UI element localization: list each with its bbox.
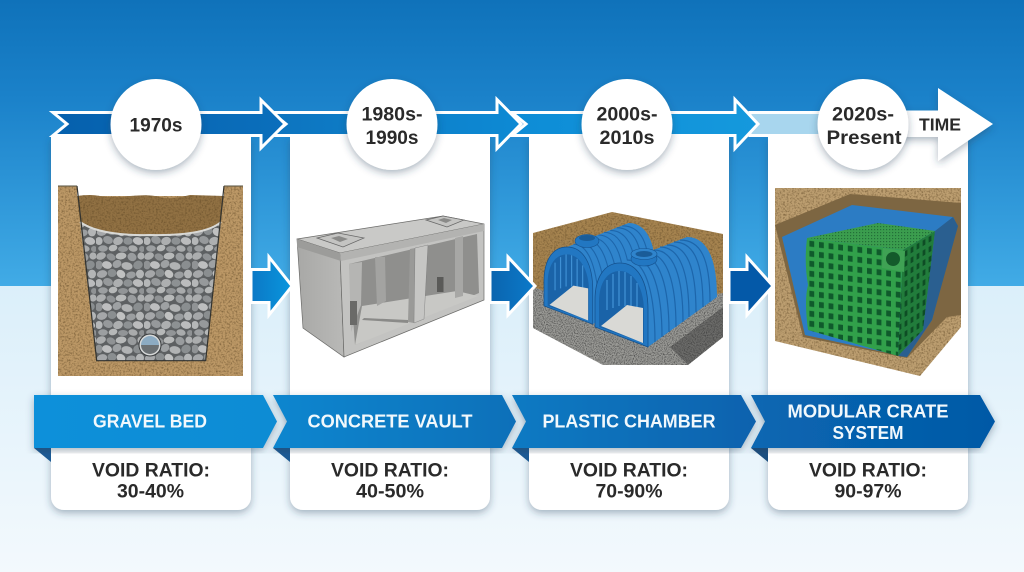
- void ratio: concrete vault: 40-50%: [356, 482, 424, 502]
- illustration: plastic arch chambers: [533, 212, 723, 365]
- void ratio: gravel bed: [92, 460, 210, 502]
- date badge: 1980s-1990s: 1980s-: [362, 104, 422, 126]
- date badge: 2020s-Present: 2020s-: [832, 104, 894, 126]
- ribbon: plastic chamber: [512, 395, 756, 462]
- illustration: concrete vault: [297, 216, 484, 357]
- void ratio: modular crate system: 90-97%: [834, 482, 902, 502]
- back chamber: [544, 223, 656, 324]
- panel: gravel bed card: [51, 137, 251, 510]
- void ratio: concrete vault: VOID RATIO:: [331, 460, 449, 482]
- date badge: 2000s-2010s: 2010s: [600, 128, 654, 149]
- ribbon: plastic chamber: PLASTIC CHAMBER: [542, 410, 716, 432]
- date badge: 1970s: [110, 79, 202, 170]
- arrow: timeline segment two: [272, 100, 521, 148]
- date badge: 2020s-Present: Present: [826, 128, 902, 149]
- panel: plastic chamber card: [529, 137, 729, 510]
- ribbon: concrete vault: CONCRETE VAULT: [308, 410, 473, 432]
- ribbon: modular crate system: MODULAR CRATE: [788, 400, 948, 422]
- void ratio: plastic chamber: 70-90%: [596, 482, 663, 502]
- background: lower pale band: [0, 286, 1024, 572]
- arrow: time arrowhead: [850, 88, 993, 161]
- date badge: 1970s: 1970s: [130, 116, 182, 136]
- void ratio: gravel bed: 30-40%: [117, 482, 184, 502]
- background: upper blue band: [0, 0, 1024, 286]
- panel: modular crate card: [768, 137, 968, 510]
- date badge: 2000s-2010s: [582, 79, 672, 170]
- date badge: 2020s-Present: [818, 79, 908, 170]
- void ratio: concrete vault: [331, 460, 449, 502]
- void ratio: gravel bed: VOID RATIO:: [92, 460, 210, 482]
- date badge: 2000s-2010s: 2000s-: [596, 104, 658, 126]
- arrow: timeline segment one: [53, 100, 285, 148]
- ribbon: modular crate system: SYSTEM: [832, 422, 904, 443]
- front chamber: [595, 237, 717, 347]
- void ratio: plastic chamber: VOID RATIO:: [570, 460, 688, 482]
- arrow: gravel to concrete: [251, 257, 292, 315]
- arrow: concrete to plastic: [490, 257, 535, 315]
- illustration: gravel bed cross-section: [58, 185, 243, 376]
- arrow: timeline segment three: [512, 100, 758, 148]
- ribbon: gravel bed: GRAVEL BED: [93, 410, 207, 432]
- void ratio: plastic chamber: [570, 460, 688, 502]
- void ratio: modular crate system: VOID RATIO:: [809, 460, 927, 482]
- arrow: timeline final segment with light fill: [750, 112, 830, 136]
- arrow: plastic to crate: [729, 257, 773, 315]
- panel: concrete vault card: [290, 137, 490, 510]
- illustration: modular crate in liner: [775, 188, 961, 376]
- ribbon: concrete vault: [273, 395, 516, 462]
- date badge: 1980s-1990s: [346, 79, 438, 170]
- ribbon: modular crate system: [751, 395, 995, 462]
- void ratio: modular crate system: [809, 460, 927, 502]
- ribbon: gravel bed: [34, 395, 277, 462]
- label: time: TIME: [919, 114, 961, 134]
- date badge: 1980s-1990s: 1990s: [366, 128, 418, 149]
